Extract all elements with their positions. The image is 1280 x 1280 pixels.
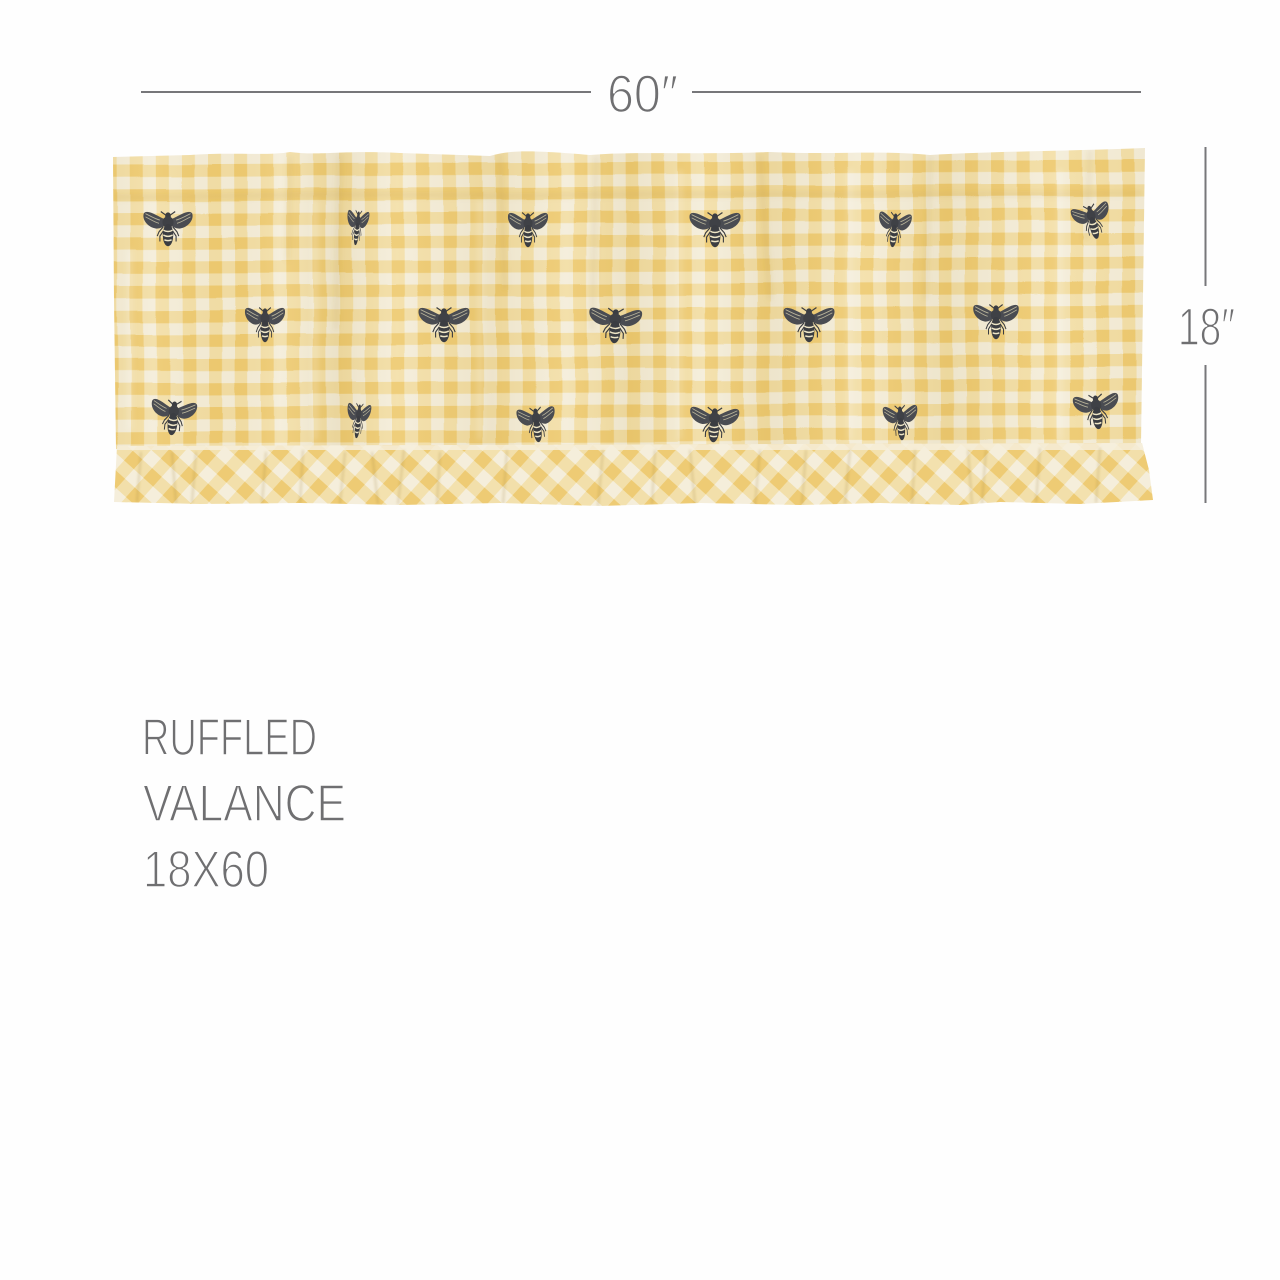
ruffle trim xyxy=(114,443,1153,506)
bees row 1 xyxy=(143,200,1116,249)
bees row 2 xyxy=(245,305,1019,345)
bees row 3 xyxy=(149,392,1121,444)
product label: VALANCE xyxy=(143,775,346,833)
product label: RUFFLED xyxy=(142,709,317,767)
product label xyxy=(142,709,346,899)
product label: 18X60 xyxy=(143,841,269,899)
curtain body gingham xyxy=(100,140,1160,460)
width dimension: 60 inches: 60″ xyxy=(607,65,678,124)
valance curtain photo xyxy=(100,140,1160,510)
height dimension: 18 inches: 18″ xyxy=(1178,298,1235,357)
